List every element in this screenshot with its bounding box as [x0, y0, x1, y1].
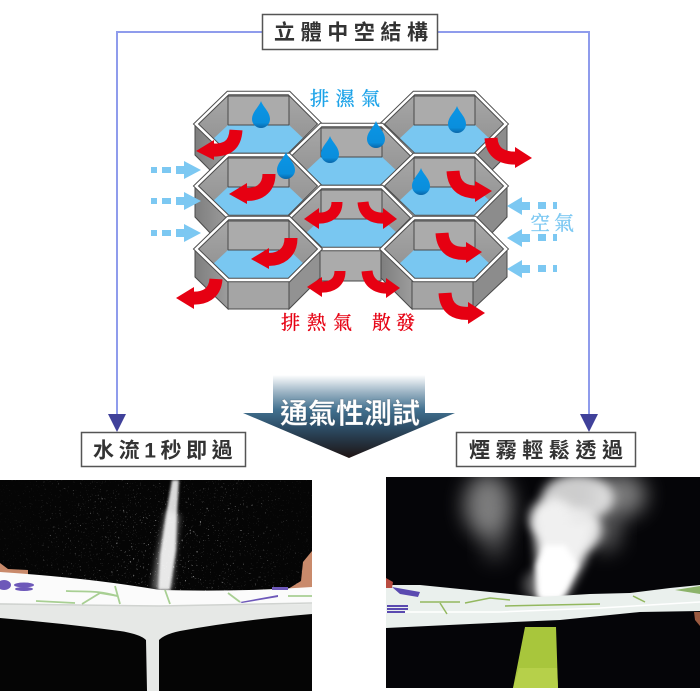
- mat: [386, 585, 700, 628]
- mat stitched line: [0, 603, 312, 606]
- photo: water flowing through the mat: [0, 480, 312, 691]
- title: [262, 14, 438, 50]
- water drops: [252, 101, 466, 195]
- label: heat exhaust: 排熱氣: [281, 312, 359, 334]
- dense smoke plume: [530, 474, 614, 597]
- faint smoke: [464, 473, 646, 599]
- label: air: 空氣: [530, 212, 578, 235]
- mat stitched line: [386, 602, 700, 612]
- label box: water: [82, 432, 246, 466]
- label box: smoke: [456, 432, 636, 466]
- honeycomb structure diagram: [176, 93, 532, 324]
- label: heat exhaust: 散發: [372, 312, 420, 334]
- arrowhead: right connector: [580, 414, 598, 432]
- smoke core: [536, 545, 578, 600]
- water spray speckle: [0, 480, 312, 591]
- photo: smoke passing through the mat: [386, 473, 700, 688]
- finger: [386, 578, 393, 588]
- front walls of the lower row: [195, 249, 507, 309]
- label box: smoke: 煙霧輕鬆透過: [469, 440, 629, 462]
- connector line: left: [117, 32, 262, 416]
- big downward arrow: [243, 375, 455, 458]
- green spray bottle: [513, 627, 558, 688]
- centre bottom back wall: [320, 248, 381, 281]
- connector line: right: [438, 32, 589, 416]
- label box: water: 水流1秒即過: [93, 440, 237, 462]
- mat print: flower: [0, 580, 288, 603]
- hexagon cells: [196, 93, 506, 280]
- mat underside: [0, 600, 312, 691]
- label: moisture exhaust: 排濕氣: [310, 88, 387, 110]
- arrowhead: left connector: [108, 414, 126, 432]
- mat print: flower: [387, 587, 420, 613]
- mat top: [0, 572, 312, 606]
- heading: breathability test: 通氣性測試: [280, 398, 420, 429]
- title: 立體中空結構: [274, 20, 434, 44]
- water jet: [152, 480, 180, 590]
- mat print: [36, 586, 312, 604]
- red heat arrows: [176, 130, 532, 324]
- blue air arrows: right: [507, 197, 557, 278]
- outer wall wedges: [195, 125, 507, 235]
- blue air arrows: left: [151, 161, 201, 242]
- fingers: [0, 551, 312, 589]
- mat print: [420, 596, 645, 614]
